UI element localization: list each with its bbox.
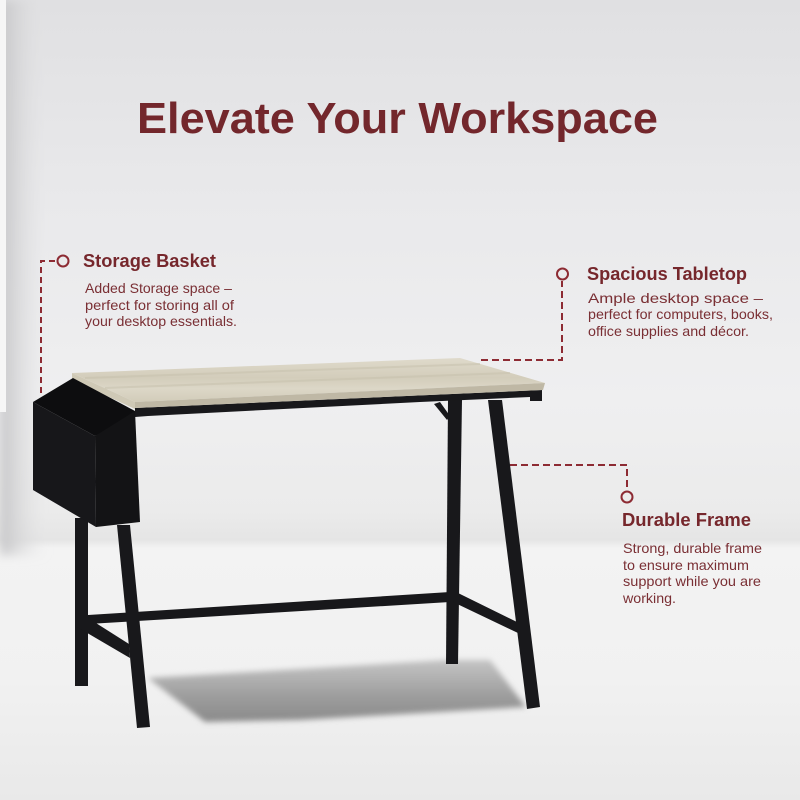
title: Elevate Your Workspace: [137, 94, 658, 143]
connector: durable frame: [510, 465, 632, 502]
connector: storage basket: [41, 256, 68, 393]
text: storage basket description: your desktop essentials.: [85, 313, 237, 329]
storage basket: [33, 378, 140, 527]
callout: durable frame: [510, 465, 762, 606]
text: spacious tabletop description: office supplies and décor.: [588, 323, 749, 339]
text: durable frame description: support while you are: [623, 573, 761, 589]
text: spacious tabletop description: Ample desktop space –: [588, 290, 763, 306]
heading: spacious tabletop: Spacious Tabletop: [587, 264, 747, 284]
desk shadow: [148, 660, 526, 722]
text: durable frame description: to ensure maximum: [623, 557, 749, 573]
desk frame: [75, 390, 542, 728]
desk: [33, 358, 545, 728]
text: storage basket description: perfect for storing all of: [85, 297, 234, 313]
tabletop: [72, 358, 545, 409]
callout: storage basket: [41, 251, 237, 393]
text: storage basket description: Added Storage space –: [85, 280, 232, 296]
heading: storage basket: Storage Basket: [83, 251, 216, 271]
text: durable frame description: Strong, durable frame: [623, 540, 762, 556]
text: spacious tabletop description: perfect for computers, books,: [588, 306, 773, 322]
connector: spacious tabletop: [481, 268, 568, 360]
text: durable frame description: working.: [622, 590, 676, 606]
heading: durable frame: Durable Frame: [622, 510, 751, 530]
callout: spacious tabletop: [481, 264, 773, 360]
